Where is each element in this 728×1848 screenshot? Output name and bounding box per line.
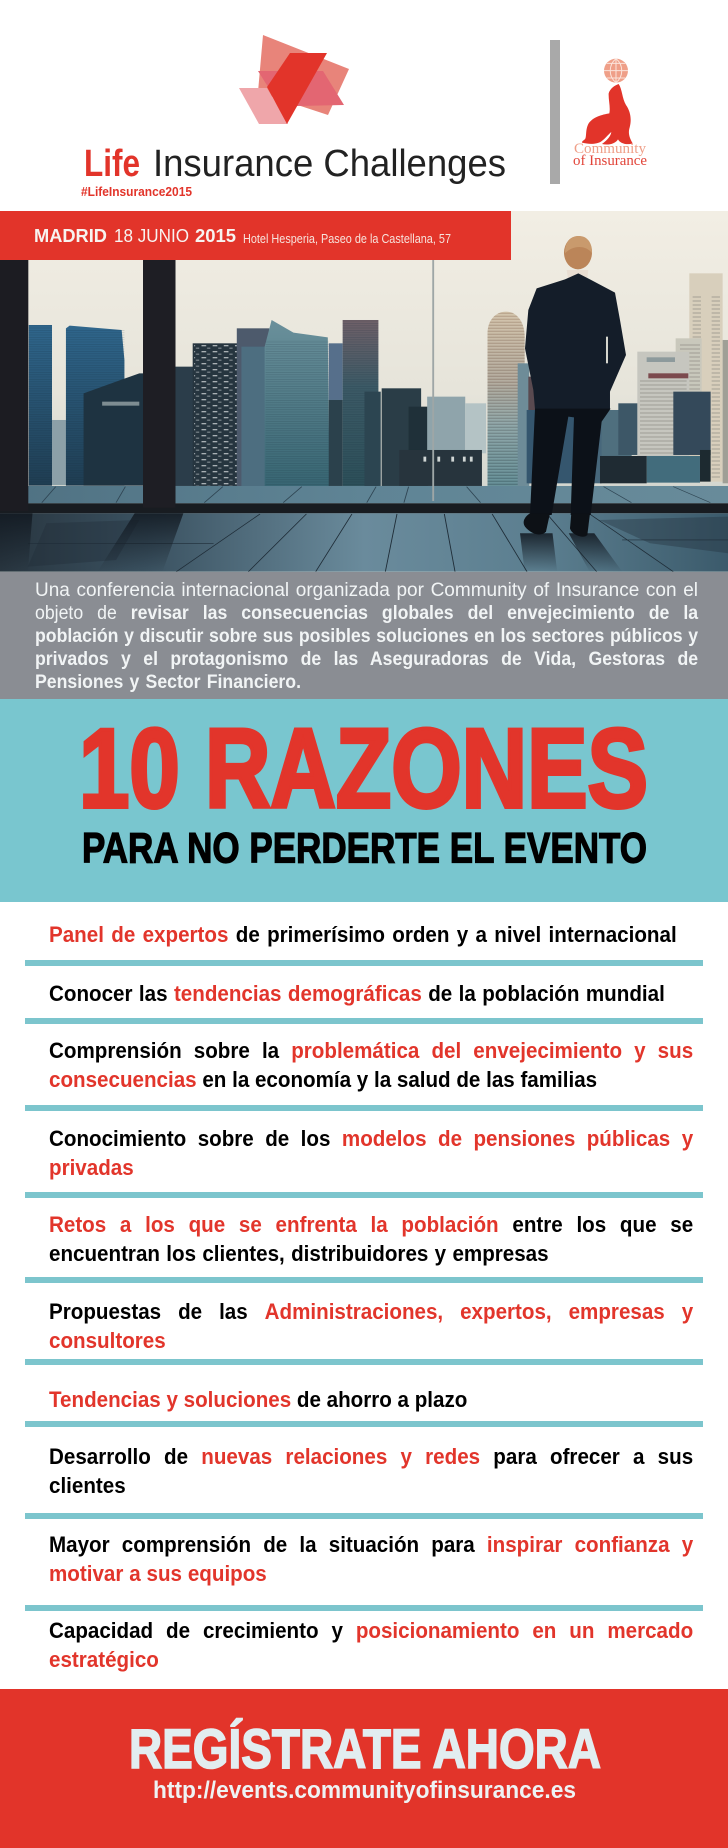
title: Life Insurance Challenges [81,143,506,199]
introduction text: población y discutir sobre sus posibles soluciones en los sectores públicos y [35,626,698,647]
reason 4: privadas [49,1155,134,1180]
introduction text: privados y el protagonismo de las Aseguradoras de Vida, Gestoras de [35,649,698,670]
reason 9: motivar a sus equipos [49,1561,267,1586]
reason 1: Panel de expertos de primerísimo orden y a nivel internacional [49,922,677,947]
skyline: left and centre buildings [29,312,529,486]
reason 5: encuentran los clientes, distribuidores y empresas [49,1241,549,1266]
reason 3: Comprensión sobre la problemática del envejecimiento y sus [49,1038,693,1063]
reason 5: Retos a los que se enfrenta la población entre los que se [49,1212,693,1237]
window columns and glass edge [0,211,434,511]
reason 5 [49,1212,693,1266]
reason 4: Conocimiento sobre de los modelos de pensiones públicas y [49,1126,693,1151]
reason 6: Propuestas de las Administraciones, expertos, empresas y [49,1299,693,1324]
logo: Community of Insurance seal: of Insurance [573,153,647,169]
date and venue banner: 2015 [195,225,236,246]
date and venue banner [0,211,511,260]
reason 6: consultores [49,1328,166,1353]
date and venue banner: MADRID [34,225,107,246]
panel: grey introduction [0,572,728,699]
photo: businessman looking at skyline [0,211,728,572]
reason 8 [49,1444,693,1498]
title: Life Insurance Challenges: Life [84,143,140,185]
logo: Community of Insurance seal [573,58,647,169]
reason 7: Tendencias y soluciones de ahorro a plazo [49,1387,467,1412]
reason 10: Capacidad de crecimiento y posicionamiento en un mercado [49,1618,693,1643]
reason 3 [49,1038,693,1092]
reason 8: Desarrollo de nuevas relaciones y redes para ofrecer a sus [49,1444,693,1469]
man in suit seen from behind [524,236,626,537]
panel: teal heading block [0,699,728,902]
introduction text: Una conferencia internacional organizada por Community of Insurance con el [35,580,698,601]
call to action: register now and URL: http://events.communityofinsurance.es [153,1777,576,1804]
reason 3: consecuencias en la economía y la salud de las familias [49,1067,597,1092]
logo: Community of Insurance seal: Community [574,141,646,157]
introduction text: Pensiones y Sector Financiero. [35,672,301,693]
date and venue banner: 18 JUNIO [114,225,189,246]
title: Life Insurance Challenges: Insurance Challenges [153,143,506,185]
terrace, window sill and interior floor [0,486,728,572]
vertical grey divider [550,40,560,184]
date and venue banner: Hotel Hesperia, Paseo de la Castellana, 57 [243,232,451,246]
panel: red call to action [0,1689,728,1848]
reason 9 [49,1532,693,1586]
event logo: overlapping red shapes [239,35,349,124]
reason 10: estratégico [49,1647,159,1672]
reason 4 [49,1126,693,1180]
reason 6 [49,1299,693,1353]
reason 2: Conocer las tendencias demográficas de la población mundial [49,981,665,1006]
introduction text: objeto de revisar las consecuencias globales del envejecimiento de la [35,603,698,624]
reason 8: clientes [49,1473,126,1498]
reason 9: Mayor comprensión de la situación para inspirar confianza y [49,1532,693,1557]
skyline: right buildings [527,273,728,483]
reason 10 [49,1618,693,1672]
introduction text [35,580,698,693]
title: Life Insurance Challenges: #LifeInsurance2015 [81,184,192,199]
